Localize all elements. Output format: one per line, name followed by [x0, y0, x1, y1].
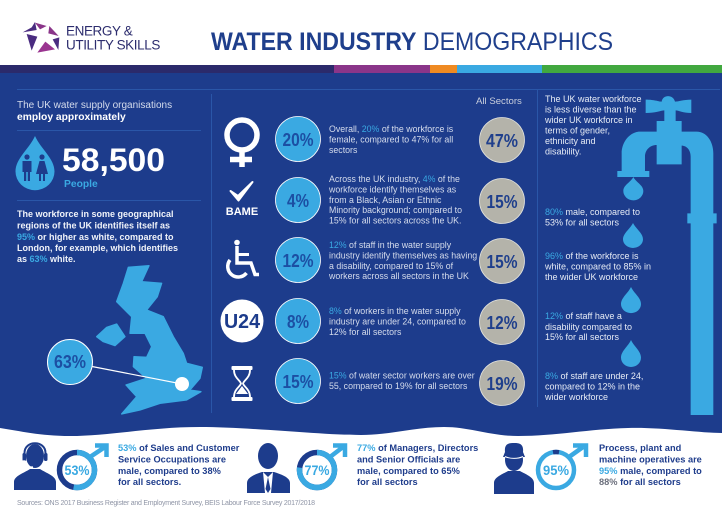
row: disability: 15% [486, 252, 518, 272]
panel: process operatives: 95% male, compared to [599, 466, 702, 476]
panel: managers: 77% of Managers, Directors [357, 443, 478, 453]
geography text: as 63% white. [17, 254, 76, 264]
row: under 24: 8% of workers in the water supply [329, 306, 461, 316]
row: BAME: workforce identify themselves as [328, 184, 457, 194]
row: gender: 47% [486, 131, 518, 151]
row: under 24 [220, 298, 524, 344]
panel: diversity facts: 8% of staff are under 24, [545, 371, 643, 381]
panel: managers [247, 443, 478, 493]
icon: water drop with people [16, 136, 54, 190]
row: disability [228, 238, 525, 284]
row: under 24: industry are under 24, compared to [329, 316, 466, 326]
icon: wheelchair [228, 240, 259, 277]
intro text: The UK water supply organisations [17, 100, 172, 111]
panel: diversity facts: disability. [545, 146, 581, 156]
row: disability: workers across all sectors in the UK [328, 271, 469, 281]
row: BAME: Across the UK industry, 4% of the [329, 174, 460, 184]
panel: workforce headline [16, 100, 178, 264]
panel: diversity facts: wider UK workforce in [544, 115, 633, 125]
chart: 53% ring [60, 446, 106, 488]
row: under 24: 12% [486, 313, 518, 333]
panel: diversity facts: 96% of the workforce is [545, 251, 639, 261]
row: gender [227, 116, 524, 167]
row: disability: a disability, compared to 15% of [329, 261, 454, 271]
row: under 24: 12% for all sectors [329, 327, 402, 337]
icon: check mark [230, 182, 252, 200]
chart: 77% ring [300, 446, 345, 488]
title: WATER INDUSTRY DEMOGRAPHICS [211, 28, 613, 56]
panel: diversity facts: white, compared to 85% in [544, 262, 651, 272]
panel: diversity facts: terms of gender, [545, 126, 610, 136]
row: over 55: 19% [486, 374, 518, 394]
row: BAME: 15% [486, 192, 518, 212]
row: disability: 12% of staff in the water supply [329, 240, 451, 250]
row: BAME: 15% for all sectors across the UK. [329, 216, 462, 226]
icon: hourglass [232, 366, 252, 401]
row: over 55: 55, compared to 19% for all sectors [329, 381, 468, 391]
panel: diversity facts: compared to 12% in the [545, 382, 640, 392]
panel: sales occupations: 53% [64, 462, 90, 478]
panel: process operatives [494, 443, 702, 494]
map: UK with London callout: 63% [54, 352, 86, 372]
row: disability: 12% [282, 251, 314, 271]
icon: U24 badge: U24 [224, 311, 261, 333]
intro text: employ approximately [17, 112, 126, 123]
row: disability: industry identify themselves as having [329, 250, 477, 260]
geography text: London, for example, which identifies [17, 243, 178, 253]
logo: Energy & Utility Skills [23, 22, 160, 53]
panel: managers: and Senior Officials are [357, 454, 460, 464]
colour stripe [0, 65, 722, 73]
icon: worker with hard hat [494, 443, 534, 494]
panel: diversity facts: 80% male, compared to [545, 207, 640, 217]
logo: Energy & Utility Skills: ENERGY & [66, 24, 133, 38]
panel: process operatives: 95% [543, 462, 570, 478]
icon: headset operator [14, 443, 56, 490]
panel: diversity facts: ethnicity and [545, 136, 596, 146]
row: gender: female, compared to 47% for all [329, 134, 453, 144]
header background [0, 0, 722, 66]
panel: managers: for all sectors [357, 477, 418, 487]
row: over 55 [232, 358, 524, 406]
panel: process operatives: machine operatives are [599, 454, 702, 464]
big number: 58,500 [62, 142, 165, 178]
icon: U24 badge [220, 300, 264, 342]
row: BAME: 4% [287, 191, 309, 211]
navy background with wave [0, 73, 722, 436]
row: gender: 20% [282, 130, 314, 150]
panel: sales occupations [14, 443, 240, 490]
panel: sales occupations: for all sectors. [118, 477, 181, 487]
logo: Energy & Utility Skills: UTILITY SKILLS [66, 38, 160, 52]
panel: diversity facts: 15% for all sectors [545, 332, 620, 342]
panel: process operatives: 88% for all sectors [599, 477, 681, 487]
panel: sales occupations: 53% of Sales and Customer [118, 443, 239, 453]
column heading: all sectors: All Sectors [476, 96, 522, 107]
chart: 95% ring [538, 446, 586, 488]
icon: business person [247, 443, 290, 493]
panel: diversity facts: 53% for all sectors [545, 218, 620, 228]
sources: Sources: ONS 2017 Business Register and Employment Survey, BEIS Labour Force Survey 2017/2018 [17, 500, 315, 507]
panel: managers: 77% [304, 462, 330, 478]
panel: diversity facts: wider workforce [544, 392, 608, 402]
row: BAME: from a Black, Asian or Ethnic [329, 195, 442, 205]
BAME label: BAME [226, 206, 258, 218]
panel: diversity facts: disability compared to [545, 322, 632, 332]
panel: sales occupations: male, compared to 38% [118, 466, 221, 476]
row: over 55: 15% of water sector workers are over [329, 370, 475, 380]
panel: sales occupations: Service Occupations are [118, 454, 226, 464]
people label: People [64, 179, 98, 190]
geography text: 95% or higher as white, compared to [17, 232, 174, 242]
geography text: The workforce in some geographical [17, 209, 174, 219]
row: under 24: 8% [287, 312, 309, 332]
panel: diversity facts: is less diverse than the [545, 104, 637, 114]
icon: female symbol [227, 120, 257, 167]
panel: diversity facts: 12% of staff have a [545, 311, 622, 321]
geography text: regions of the UK identifies itself as [17, 220, 170, 230]
row: BAME: Minority background; compared to [329, 205, 462, 215]
panel: diversity facts: The UK water workforce [545, 94, 642, 104]
map: UK with London callout [48, 266, 202, 414]
row: BAME [226, 174, 524, 226]
row: gender: Overall, 20% of the workforce is [329, 124, 453, 134]
row: over 55: 15% [282, 372, 314, 392]
panel: managers: male, compared to 65% [357, 466, 460, 476]
icon: water tap and pipe [617, 96, 717, 415]
panel: diversity facts [544, 94, 651, 402]
panel: diversity facts: the wider UK workforce [545, 272, 638, 282]
row: gender: sectors [329, 145, 358, 155]
panel: process operatives: Process, plant and [599, 443, 682, 453]
